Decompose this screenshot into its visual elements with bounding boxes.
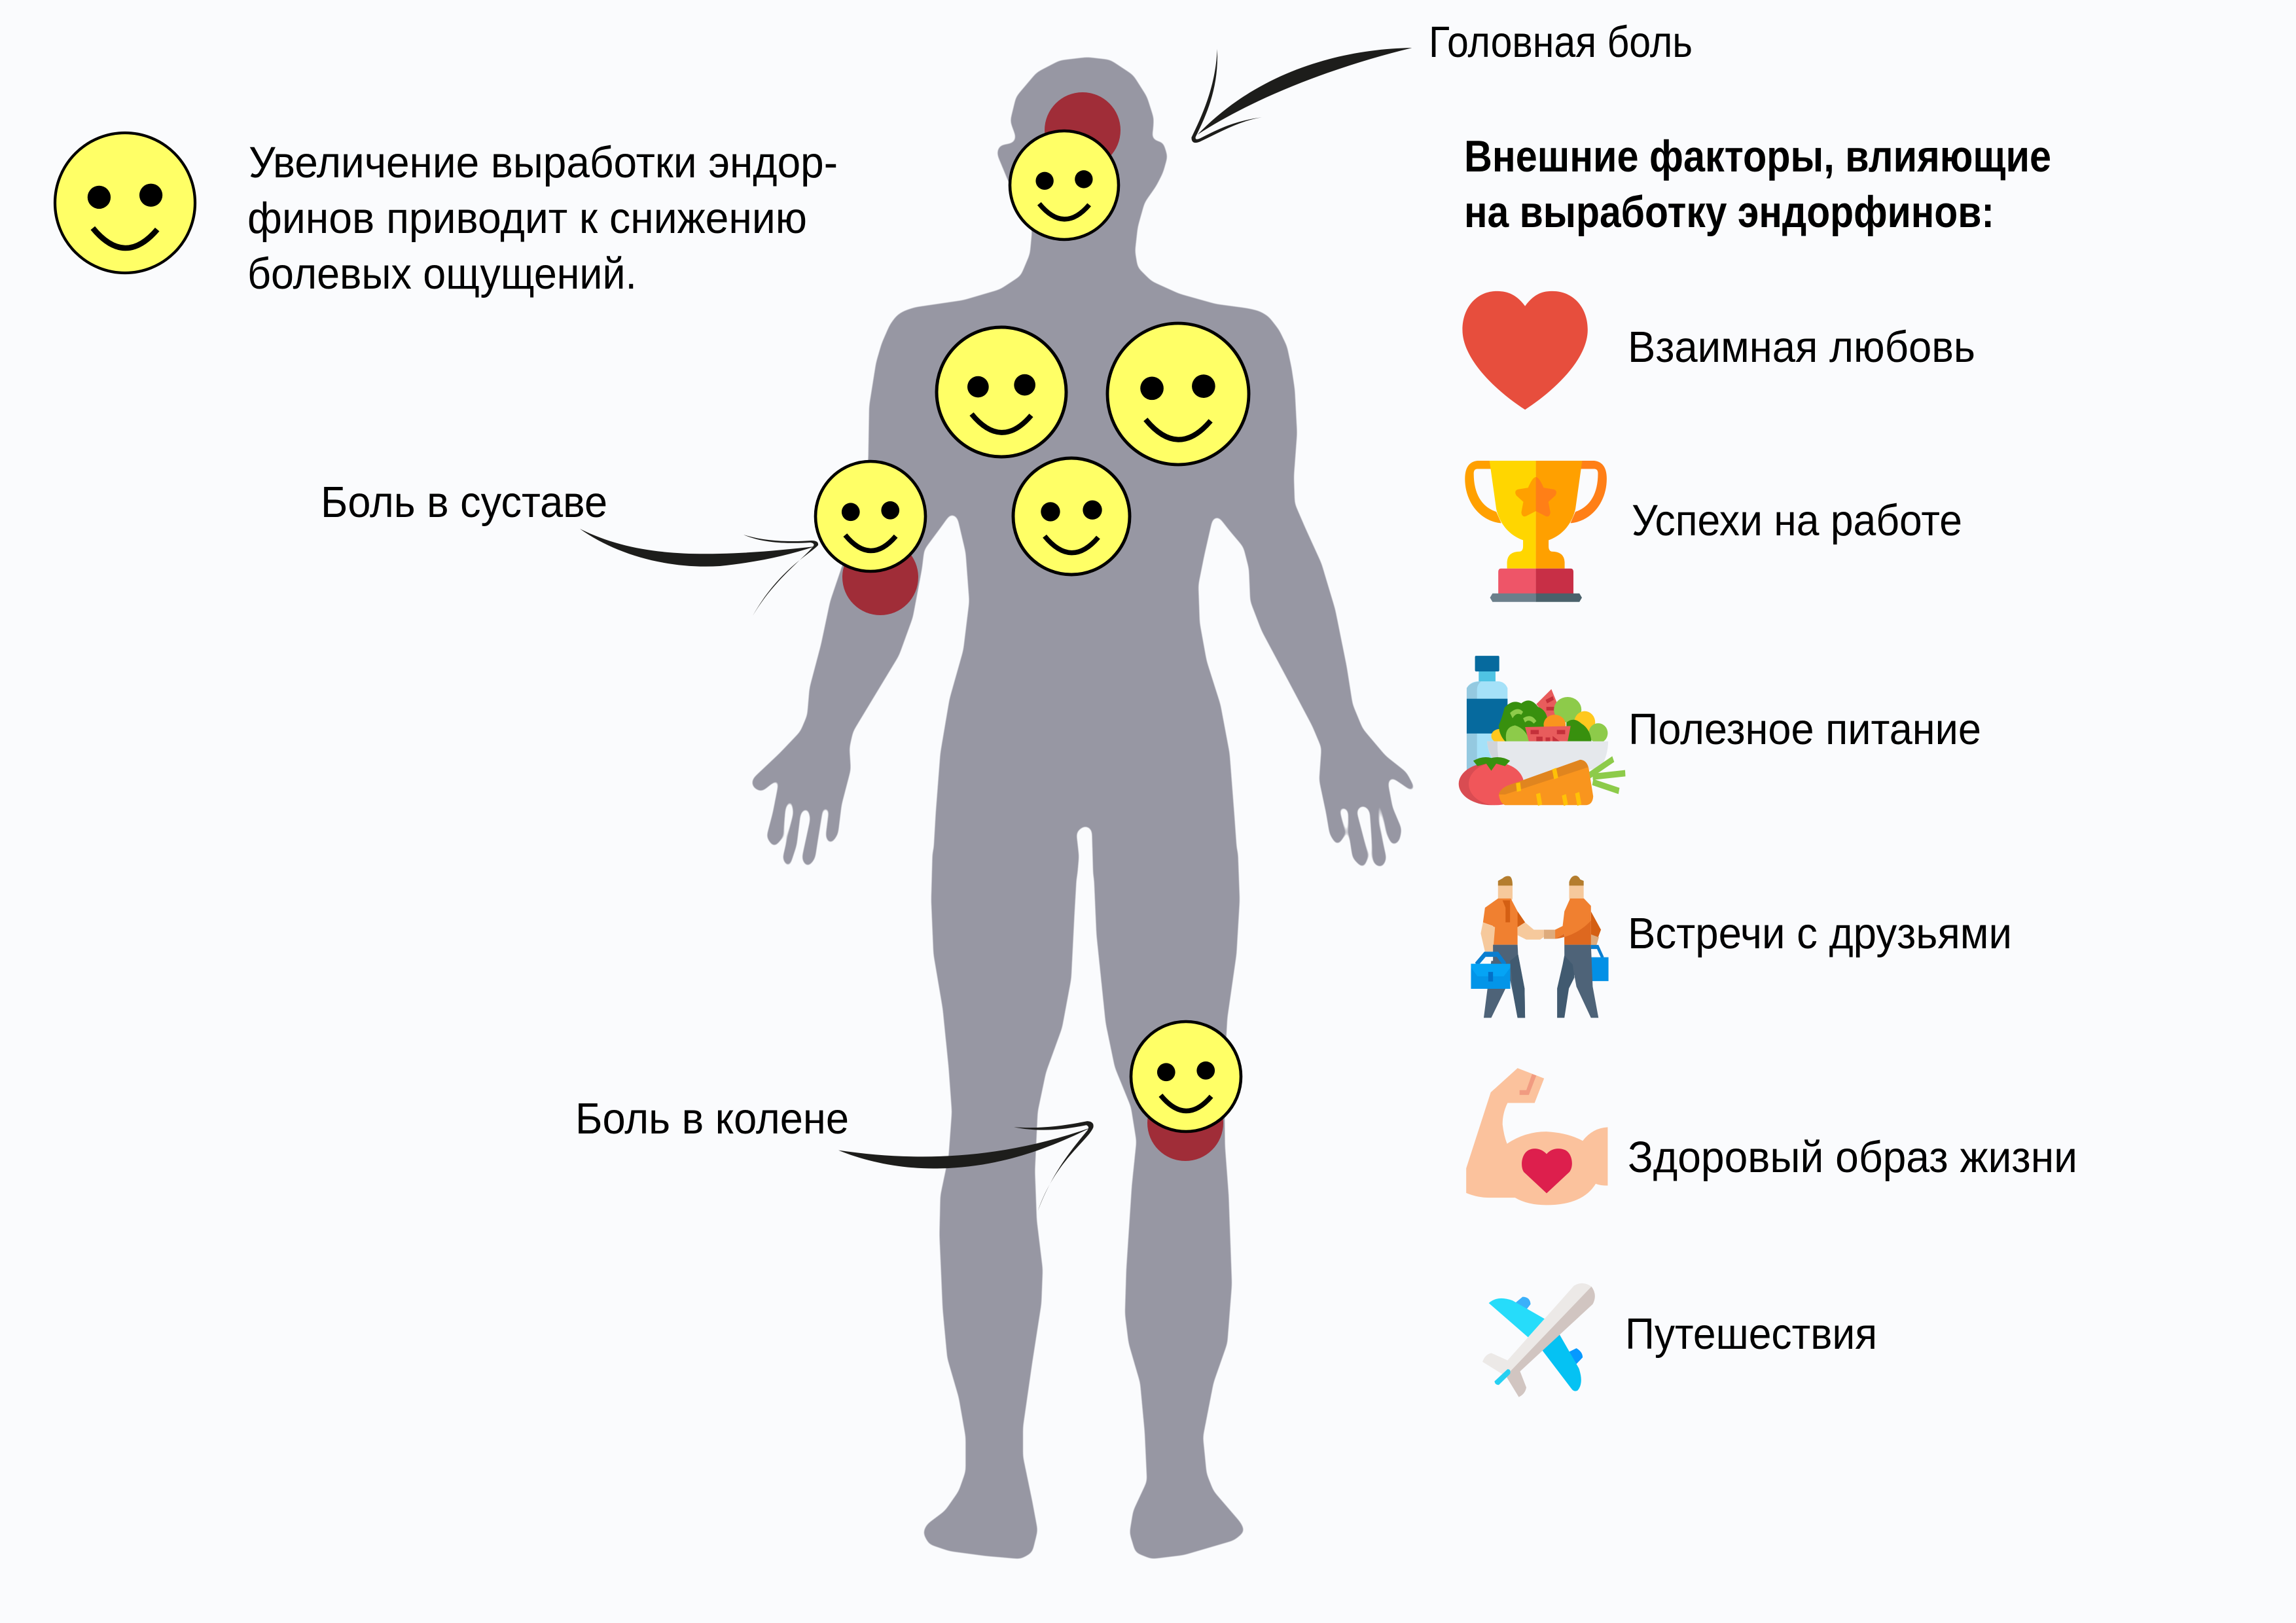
factor: love: Взаимная любовь bbox=[1628, 323, 1975, 372]
pain spot: knee bbox=[1147, 1085, 1223, 1161]
label: joint pain: Боль в суставе bbox=[321, 478, 607, 527]
smiley: center torso bbox=[1013, 458, 1130, 575]
icon: flexed arm with heart bbox=[1466, 1068, 1607, 1205]
factor: work success: Успехи на работе bbox=[1632, 496, 1962, 545]
icon: healthy food bbox=[1459, 656, 1625, 805]
heading: external factors: Внешние факторы, влияющие bbox=[1464, 132, 2051, 181]
pain spot: head bbox=[1045, 92, 1121, 168]
heading: external factors: на выработку эндорфинов: bbox=[1464, 187, 1994, 237]
icon: airplane bbox=[1482, 1283, 1595, 1397]
icon: trophy bbox=[1465, 461, 1607, 602]
smiley: chest right bbox=[1107, 323, 1249, 465]
factor: meeting friends: Встречи с друзьями bbox=[1628, 909, 2012, 958]
smiley: knee bbox=[1131, 1022, 1241, 1132]
legend text: Увеличение выработки эндор- bbox=[249, 138, 838, 187]
label: knee pain: Боль в колене bbox=[575, 1094, 849, 1143]
pain spot: arm joint bbox=[842, 539, 918, 615]
arrow: to head bbox=[1191, 48, 1412, 143]
smiley: head bbox=[1010, 131, 1119, 240]
smiley: chest left bbox=[937, 327, 1066, 457]
legend text: болевых ощущений. bbox=[247, 249, 637, 298]
icon: friends shaking hands bbox=[1471, 876, 1609, 1018]
icon: heart bbox=[1462, 291, 1588, 410]
factor: healthy food: Полезное питание bbox=[1628, 705, 1981, 754]
arrow: to arm joint bbox=[580, 529, 818, 616]
human body silhouette bbox=[752, 57, 1415, 1559]
heading: external factors bbox=[1464, 132, 2051, 237]
legend text: финов приводит к снижению bbox=[247, 194, 807, 243]
legend text bbox=[247, 138, 838, 298]
factor: healthy lifestyle: Здоровый образ жизни bbox=[1628, 1133, 2077, 1182]
label: headache: Головная боль bbox=[1429, 18, 1693, 67]
smiley: arm bbox=[816, 461, 925, 571]
factor: travel: Путешествия bbox=[1625, 1310, 1877, 1359]
arrow: to knee bbox=[838, 1121, 1094, 1211]
smiley: legend bbox=[55, 133, 195, 273]
